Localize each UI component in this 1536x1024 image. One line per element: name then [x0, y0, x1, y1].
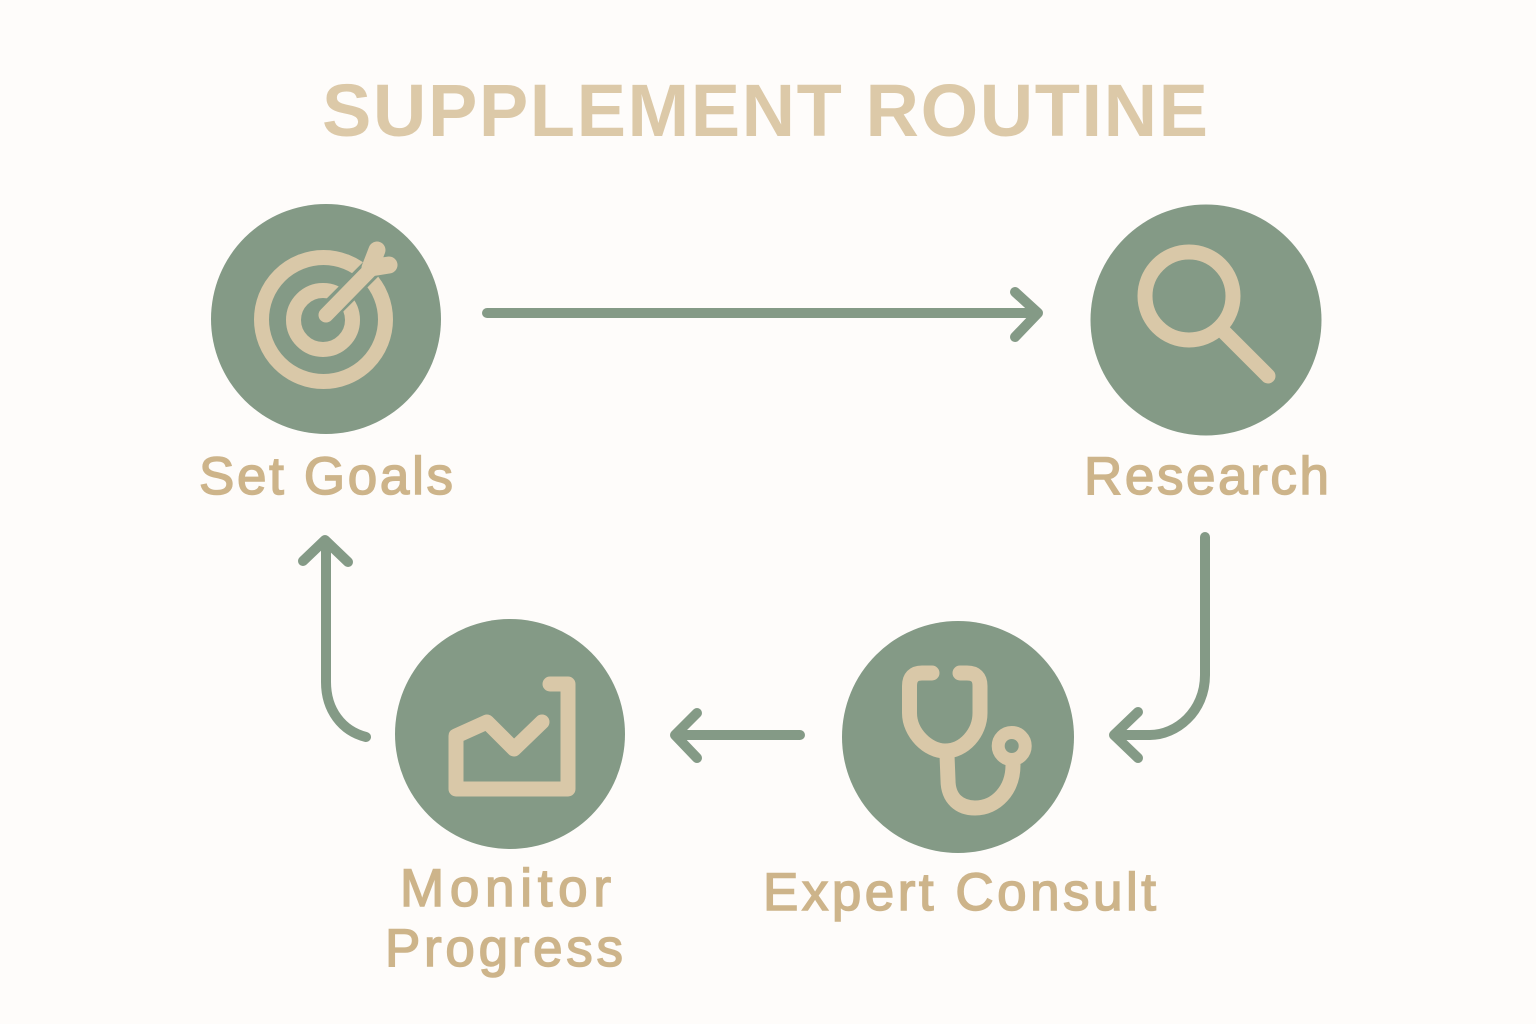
title: SUPPLEMENT ROUTINE [322, 69, 1208, 152]
label: monitor progress: Monitor [400, 859, 611, 918]
icon: target with arrow [211, 204, 441, 434]
label: monitor progress [385, 859, 623, 978]
step: set goals [199, 204, 453, 506]
step: monitor progress [385, 619, 625, 978]
label: research: Research [1084, 447, 1329, 506]
arrow: expert consult to monitor progress [675, 713, 800, 758]
icon: stethoscope [842, 621, 1074, 853]
label: expert consult: Expert Consult [763, 863, 1156, 922]
arrow: monitor progress to set goals [303, 540, 366, 737]
arrow: research to expert consult [1114, 537, 1205, 758]
arrow: set goals to research [487, 292, 1038, 337]
step: expert consult [763, 621, 1156, 922]
icon: progress chart [395, 619, 625, 849]
label: monitor progress: Progress [385, 919, 623, 978]
label: set goals: Set Goals [199, 447, 453, 506]
icon: magnifying glass [1090, 204, 1322, 436]
step: research [1084, 204, 1329, 506]
